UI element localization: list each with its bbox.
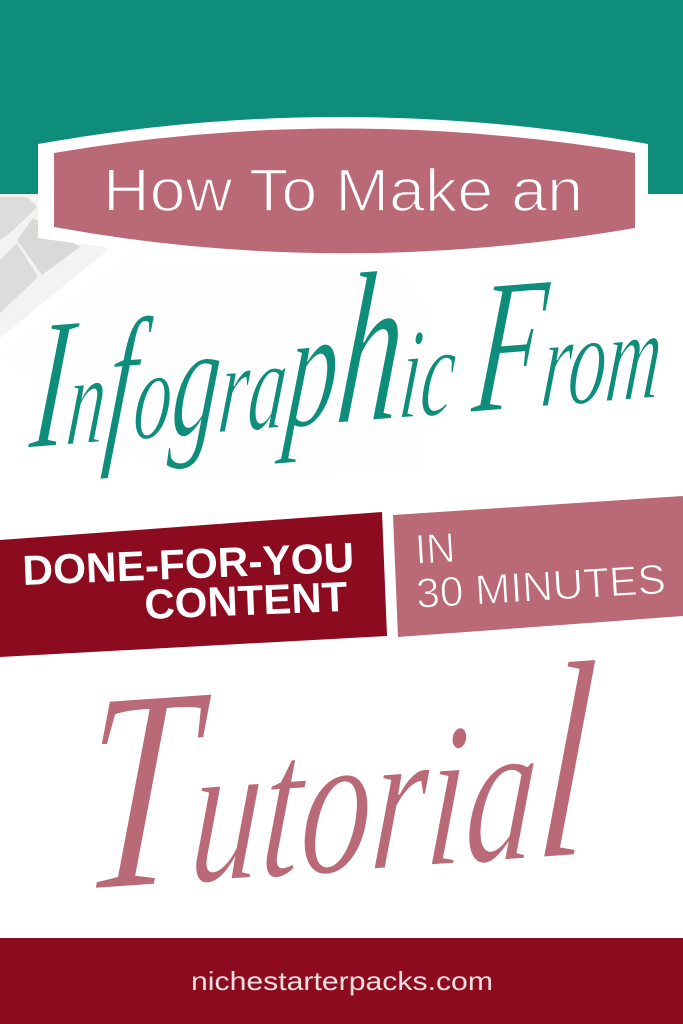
banner heading: How To Make an	[103, 157, 583, 224]
ribbon text: 30 MINUTES	[415, 555, 667, 617]
banner pink fill	[54, 128, 635, 253]
ribbon pink shape	[393, 496, 683, 637]
ribbon text	[21, 534, 355, 628]
script heading: Tutorial: Tutorial	[74, 599, 605, 952]
ribbon text	[414, 524, 667, 617]
footer website text: nichestarterpacks.com	[191, 966, 493, 996]
top teal band	[0, 0, 683, 194]
banner white outline	[38, 117, 648, 260]
title banner	[38, 117, 648, 260]
ribbon text: CONTENT	[143, 573, 349, 628]
ribbon text: IN	[414, 524, 456, 573]
ribbon dark red shape	[0, 512, 387, 657]
ribbon: done-for-you content	[0, 512, 387, 657]
background photo: faded keyboard and device	[0, 190, 430, 480]
ribbon: in 30 minutes	[393, 496, 683, 637]
ribbon text: DONE-FOR-YOU	[21, 534, 355, 594]
footer bar	[0, 938, 683, 1024]
